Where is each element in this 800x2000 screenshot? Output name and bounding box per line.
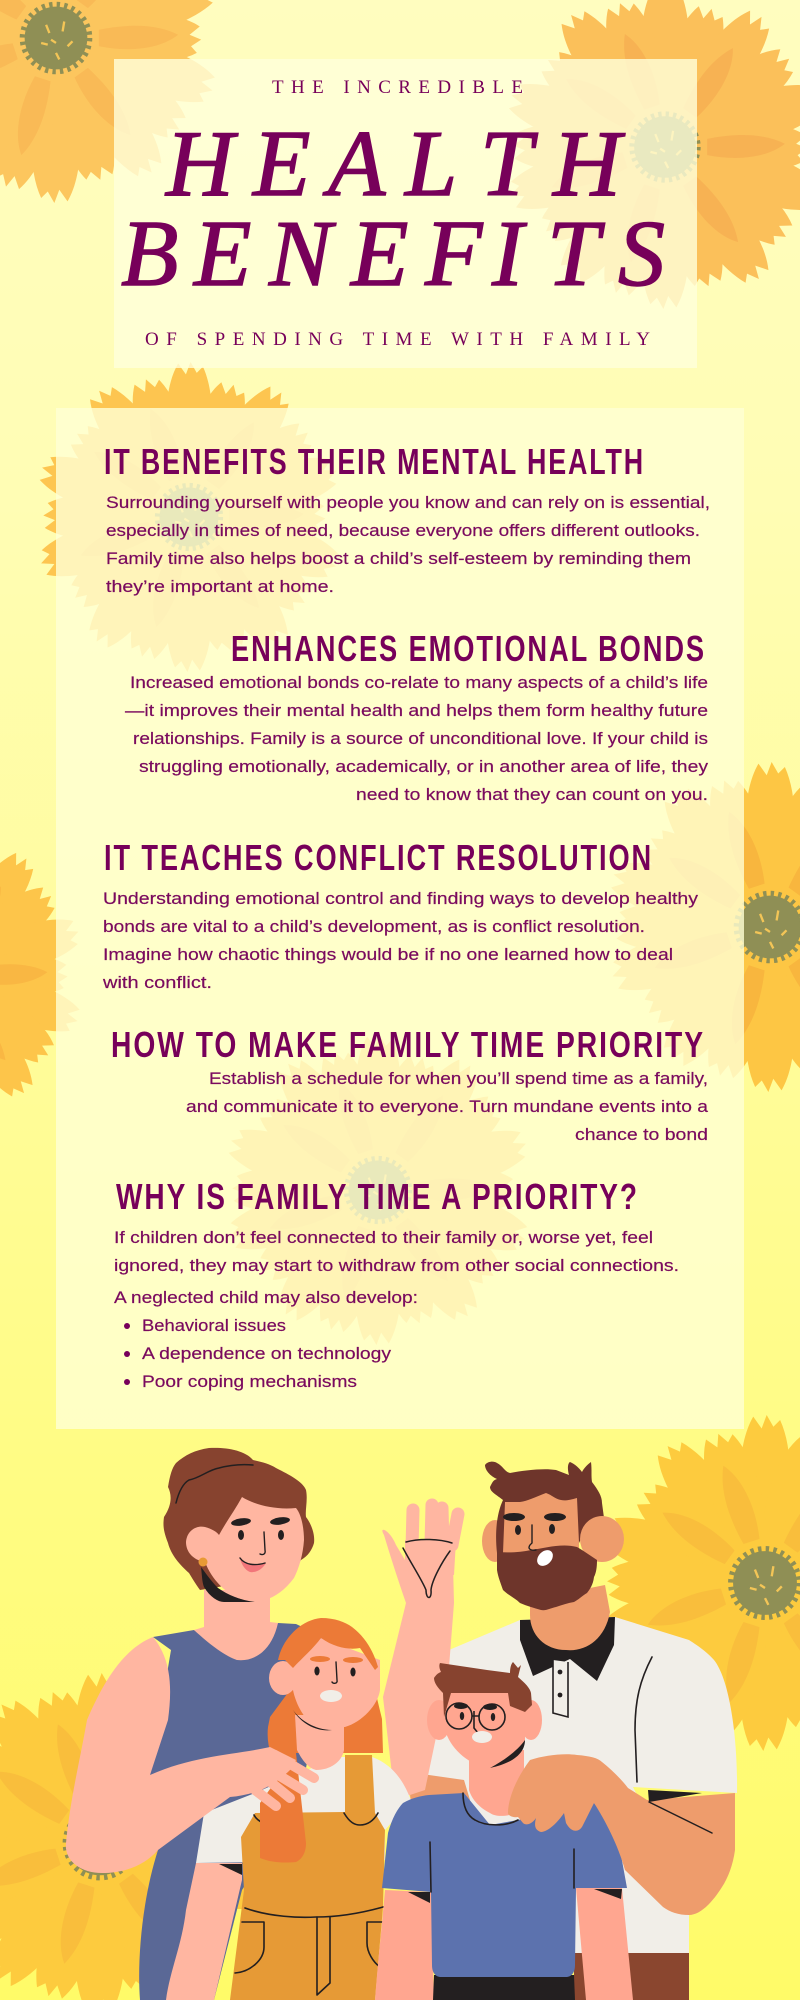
bullet list xyxy=(124,1317,392,1391)
figure: father xyxy=(408,1462,737,2000)
text block: mental health: especially in times of need, because everyone offers different outlooks. xyxy=(106,522,700,540)
boy sleeve marks xyxy=(408,1842,622,1903)
bullet list: Behavioral issues xyxy=(142,1317,286,1335)
mother raised arm xyxy=(383,1603,454,1800)
girl head xyxy=(293,1638,380,1727)
boy features xyxy=(454,1703,497,1743)
father shirt xyxy=(408,1617,737,1953)
panel: content backdrop xyxy=(56,408,744,1429)
text block: conflict resolution: with conflict. xyxy=(102,974,212,992)
heading: why priority: WHY IS FAMILY TIME A PRIORITY? xyxy=(116,1176,639,1217)
text block: why priority xyxy=(114,1229,679,1307)
text block: mental health: Surrounding yourself with people you know and can rely on is essential, xyxy=(106,494,710,512)
text block: why priority: A neglected child may also develop: xyxy=(114,1289,418,1307)
text block: family time priority: chance to bond xyxy=(575,1126,708,1144)
mother features xyxy=(231,1516,290,1572)
boy chin shadow xyxy=(490,1740,525,1768)
flower: behind content panel bottom xyxy=(224,1035,532,1345)
mother hair line xyxy=(176,1465,253,1503)
flower: behind content panel top xyxy=(35,362,343,672)
text block: family time priority: Establish a schedule for when you’ll spend time as a family, xyxy=(209,1070,708,1088)
earring xyxy=(198,1558,208,1566)
text block: conflict resolution: Understanding emotional control and finding ways to develop healthy xyxy=(103,890,699,908)
girl features xyxy=(310,1656,363,1702)
father arm crease xyxy=(649,1802,712,1833)
father sleeve shadow xyxy=(648,1790,702,1802)
title: overline: THE INCREDIBLE xyxy=(272,77,523,98)
text block: mental health: Family time also helps boost a child’s self-esteem by reminding them xyxy=(106,550,691,568)
sleeve shadow xyxy=(219,1864,242,1875)
boy t-shirt xyxy=(382,1793,627,1977)
text block: emotional bonds: struggling emotionally, academically, or in another area of life, they xyxy=(139,758,709,776)
text block: mental health xyxy=(106,494,710,596)
father trousers xyxy=(574,1950,689,2000)
girl white shirt xyxy=(196,1757,411,1863)
girl far arm xyxy=(166,1863,242,2000)
text block: conflict resolution xyxy=(102,890,699,992)
flower: bottom right xyxy=(598,1415,800,1751)
father left ear xyxy=(482,1520,508,1562)
mother raised hand xyxy=(382,1505,458,1603)
boy arms xyxy=(375,1888,633,2000)
mother neck and chest xyxy=(194,1590,278,1660)
text block: why priority: ignored, they may start to withdraw from other social connections. xyxy=(114,1257,679,1275)
mother hair xyxy=(163,1448,314,1590)
text block: why priority: If children don’t feel connected to their family or, worse yet, feel xyxy=(114,1229,653,1247)
text block: mental health: they’re important at home. xyxy=(106,578,334,596)
section: how to make family time priority xyxy=(111,1024,709,1144)
boy glasses xyxy=(446,1703,505,1733)
figure: boy xyxy=(375,1662,633,2000)
flower: top left xyxy=(0,0,220,203)
girl ears xyxy=(269,1661,297,1695)
section: emotional bonds xyxy=(125,628,709,804)
flower: top right xyxy=(504,0,800,309)
illustration: family xyxy=(66,1448,737,2000)
father features xyxy=(503,1513,566,1550)
bullet list: A dependence on technology xyxy=(142,1345,392,1363)
text block: emotional bonds xyxy=(125,674,709,804)
flower: bottom left xyxy=(0,1673,269,2000)
boy trousers xyxy=(433,1975,575,2000)
title: HEALTH: HEALTH xyxy=(164,112,626,216)
father neck xyxy=(530,1585,610,1650)
father mouth xyxy=(534,1547,556,1569)
girl overalls xyxy=(230,1755,385,2000)
girl neck xyxy=(295,1715,344,1770)
father arm behind boy xyxy=(408,1772,470,1805)
mother fingers xyxy=(255,1755,314,1806)
father beard xyxy=(497,1545,597,1610)
text block: family time priority xyxy=(186,1070,709,1144)
figure: girl xyxy=(166,1618,411,2000)
overall details xyxy=(235,1813,385,1995)
section: mental health xyxy=(104,441,710,596)
father arm on boy's shoulder xyxy=(508,1754,735,1915)
panel: title backdrop xyxy=(114,59,697,368)
text block: family time priority: and communicate it to everyone. Turn mundane events into a xyxy=(186,1098,709,1116)
mother dress xyxy=(139,1623,330,2000)
flower: middle left xyxy=(0,830,85,1120)
girl back hair xyxy=(260,1690,383,1863)
father right ear xyxy=(580,1516,624,1562)
girl fringe xyxy=(278,1618,378,1670)
figure: mother xyxy=(139,1448,458,2000)
flower: middle right xyxy=(606,762,800,1092)
father collar xyxy=(520,1617,615,1681)
shirt placket xyxy=(553,1660,568,1717)
mother arm over girl xyxy=(66,1637,314,1873)
title: subtitle: OF SPENDING TIME WITH FAMILY xyxy=(145,329,650,350)
boy ears xyxy=(427,1700,451,1740)
father face xyxy=(503,1490,579,1560)
boy hair xyxy=(434,1662,532,1717)
text block: conflict resolution: bonds are vital to a child’s development, as is conflict resolution. xyxy=(103,918,645,936)
father hair xyxy=(485,1462,604,1553)
section: why is family time a priority xyxy=(114,1176,679,1391)
text block: emotional bonds: Increased emotional bonds co-relate to many aspects of a child’s life xyxy=(130,674,708,692)
text block: emotional bonds: need to know that they can count on you. xyxy=(356,786,708,804)
girl neck shadow xyxy=(293,1710,332,1730)
title block xyxy=(121,77,665,350)
mother face xyxy=(186,1497,304,1600)
text block: emotional bonds: —it improves their mental health and helps them form healthy future xyxy=(125,702,708,720)
boy head xyxy=(446,1693,525,1768)
boy collar xyxy=(463,1793,518,1825)
boy neck xyxy=(469,1750,524,1816)
bullet list: Poor coping mechanisms xyxy=(142,1373,357,1391)
title: BENEFITS: BENEFITS xyxy=(121,202,665,306)
text block: conflict resolution: Imagine how chaotic things would be if no one learned how to deal xyxy=(103,946,673,964)
section: conflict resolution xyxy=(102,837,699,992)
mother neck shadow xyxy=(201,1567,255,1602)
text block: emotional bonds: relationships. Family is a source of unconditional love. If your child is xyxy=(133,730,708,748)
